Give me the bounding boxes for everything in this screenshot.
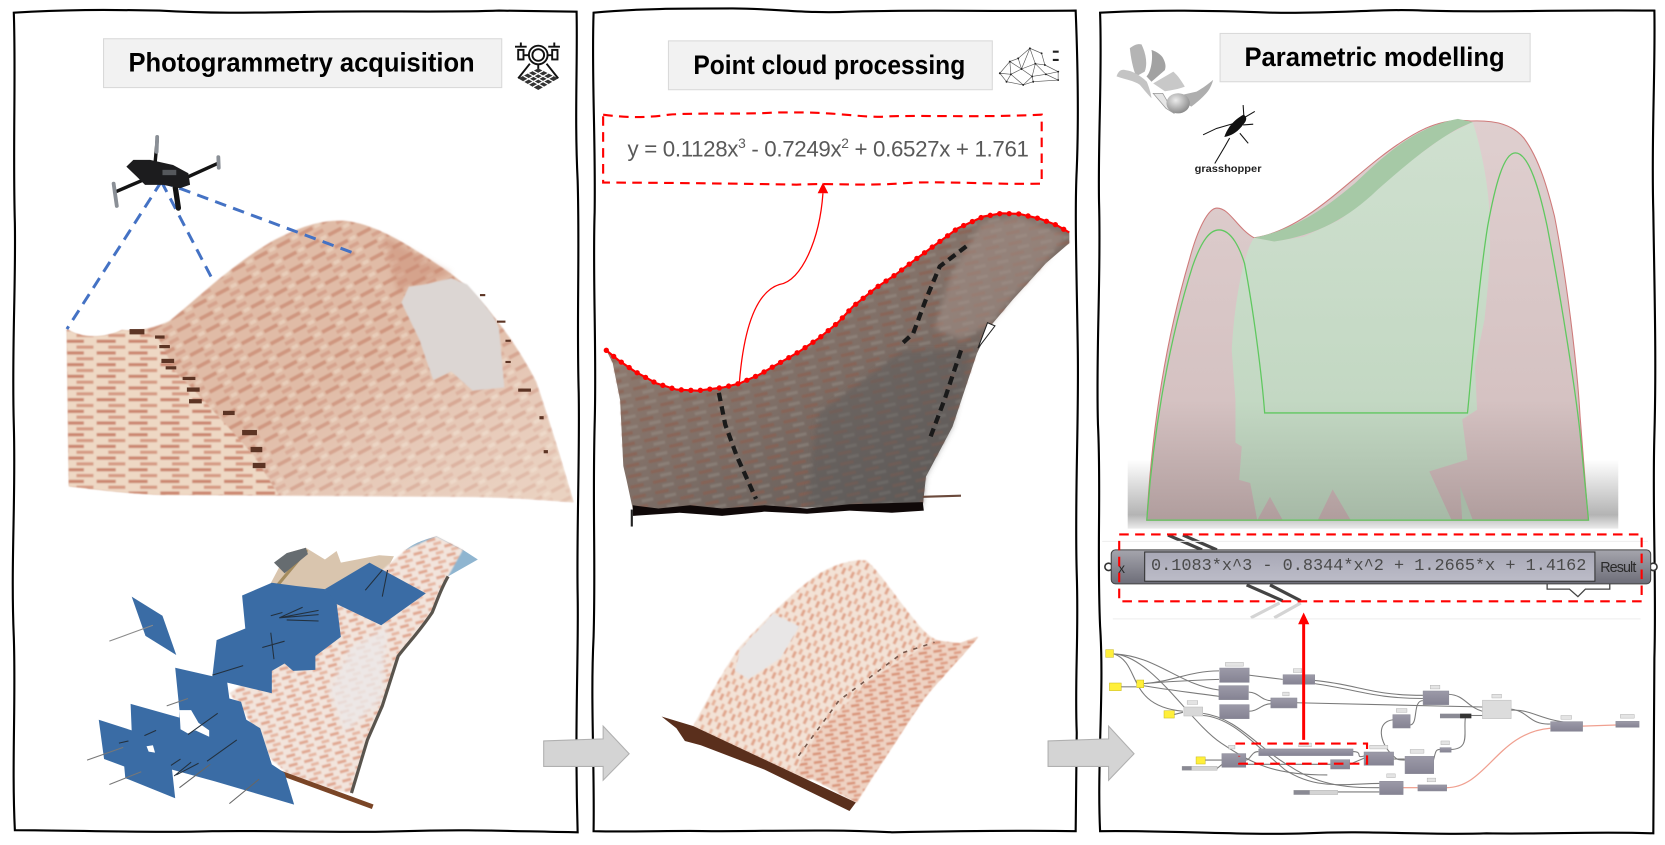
panel border — [592, 8, 1078, 832]
plaster patch — [401, 278, 504, 391]
expression field — [1145, 552, 1595, 581]
arrow: processing to modelling — [1048, 726, 1134, 780]
arrow: selected component to enlarged view — [1298, 613, 1309, 740]
photogrammetric model with camera planes — [87, 536, 478, 807]
stepped dark bricks — [130, 294, 548, 468]
equation text: + 0.6527x + 1.761 — [849, 137, 1029, 162]
wall dark edge — [351, 576, 448, 793]
panel: parametric modelling — [1097, 10, 1657, 834]
green section outline — [1147, 153, 1589, 520]
icon: drone over grid — [515, 42, 560, 90]
dark base strip — [633, 502, 924, 516]
icon: drone — [114, 137, 219, 208]
expression text: 0.1083*x^3 - 0.8344*x^2 + 1.2665*x + 1.4162 — [1151, 557, 1586, 576]
panel: photogrammetry acquisition — [13, 10, 579, 832]
equation text: 3 — [738, 136, 746, 151]
vault surface — [693, 560, 978, 803]
output label: Result — [1600, 560, 1636, 576]
parametric model overlay — [1128, 119, 1618, 529]
camera axis lines — [87, 570, 388, 804]
callout tab — [1547, 584, 1610, 597]
heading box: Parametric modelling: Parametric modelling — [1245, 42, 1505, 72]
brick wall — [229, 536, 463, 793]
white gap — [978, 323, 995, 348]
camera sight lines — [67, 182, 353, 329]
small green tooth — [1460, 486, 1473, 520]
green model surface — [1232, 122, 1490, 520]
point cloud section view — [606, 213, 1069, 527]
heading box: Point cloud processing — [668, 41, 992, 90]
component ports — [1105, 563, 1657, 571]
component body — [1111, 550, 1651, 584]
wires — [1114, 654, 1582, 792]
light nodes and sliders — [1182, 700, 1511, 795]
background wires and grid — [1102, 535, 1648, 619]
wall light patch — [329, 626, 388, 732]
input label: x — [1118, 561, 1125, 576]
equation callout — [603, 112, 1042, 185]
gaps between planes — [179, 710, 209, 737]
pink scan surface — [1147, 120, 1588, 520]
vault left lighter section — [67, 329, 278, 495]
crown brick band — [382, 236, 451, 293]
grasshopper node graph — [1106, 650, 1639, 795]
heading box: Parametric modelling — [1220, 33, 1530, 82]
dark seam — [799, 642, 934, 756]
dashed red frame — [1119, 534, 1642, 601]
brick texture — [606, 213, 1069, 510]
sky fragment — [406, 536, 478, 576]
ground shadow — [1128, 460, 1618, 529]
brown beam — [234, 756, 373, 807]
vault main surface — [67, 221, 573, 502]
joint cracks — [719, 246, 966, 499]
component nodes — [1219, 668, 1639, 795]
orange result wires — [1403, 725, 1616, 788]
node name tags — [1187, 662, 1634, 782]
upper right lighter bricks — [934, 217, 1067, 340]
heading box: Photogrammetry acquisition — [104, 39, 502, 88]
lower right grey area — [807, 350, 972, 506]
dashed red selection — [1235, 744, 1367, 764]
darker green upper band — [1254, 119, 1473, 242]
brown base strip — [662, 717, 856, 811]
lower right darker bricks — [791, 637, 978, 803]
icon: grasshopper logo — [1195, 105, 1262, 175]
equation text: - 0.7249x — [745, 137, 842, 162]
blue camera planes — [99, 563, 426, 805]
panel: point cloud processing — [592, 8, 1078, 832]
grasshopper expression component enlarged — [1102, 534, 1657, 619]
fitted section points — [606, 213, 1069, 391]
panel border — [1097, 10, 1655, 834]
yellow parameter panels — [1106, 650, 1205, 764]
point cloud surface — [606, 213, 1069, 510]
heading box: Point cloud processing: Point cloud processing — [693, 50, 965, 80]
equation text: 2 — [841, 136, 849, 151]
panel border — [13, 10, 579, 832]
equation text: y = 0.1128x — [628, 137, 738, 162]
heading box: Photogrammetry acquisition: Photogrammetry acquisition — [128, 48, 475, 78]
arrow: acquisition to processing — [544, 726, 629, 780]
plaster patch — [735, 614, 800, 679]
lower right paler area — [67, 221, 573, 502]
photo of brick vault with camera sight lines — [67, 221, 573, 502]
textured vault model — [662, 560, 978, 811]
icon: rhino logo — [1117, 44, 1213, 114]
icon: grasshopper logo: grasshopper — [1195, 164, 1262, 175]
icon: point cloud mesh — [999, 47, 1059, 86]
arrow: curve to equation — [739, 183, 828, 386]
surrounding building fragments — [268, 548, 394, 600]
